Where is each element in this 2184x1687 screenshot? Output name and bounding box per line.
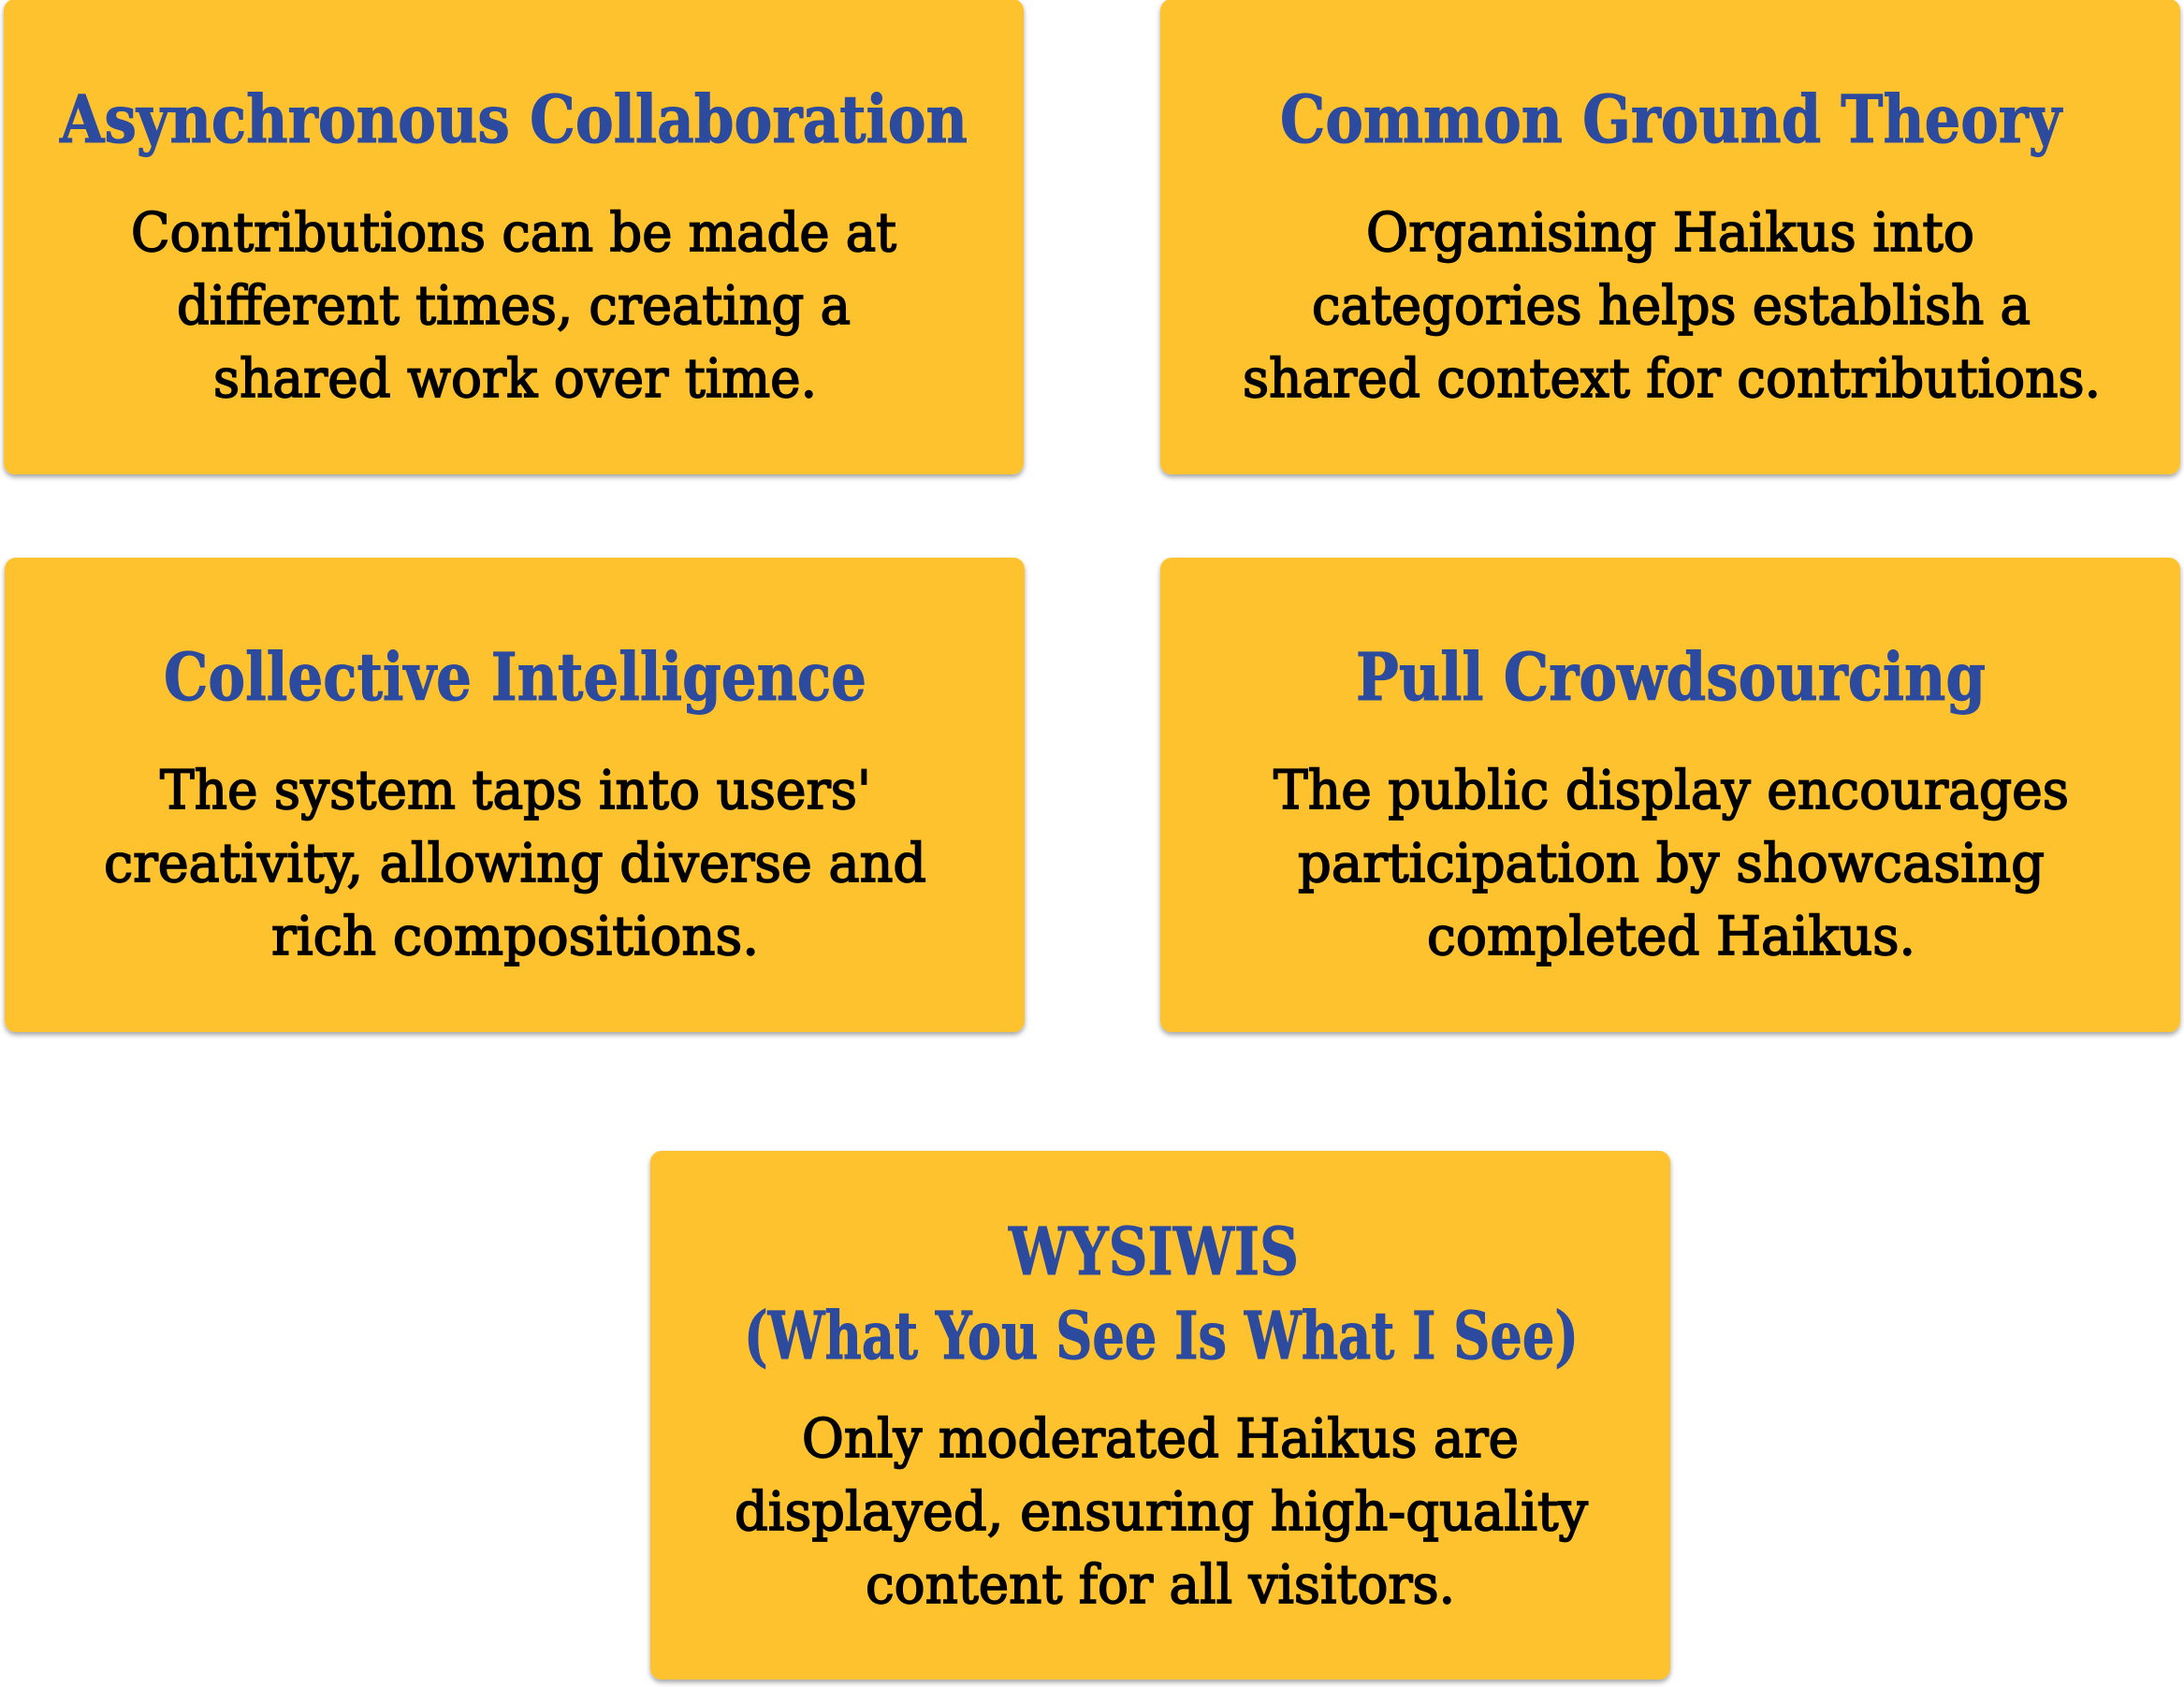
text block: Collective Intelligence description: creativity, allowing diverse and bbox=[104, 833, 926, 894]
text block: Pull Crowdsourcing description: completed Haikus. bbox=[1427, 906, 1915, 967]
heading: WYSIWIS (What You See Is What I See): (What You See Is What I See) bbox=[744, 1297, 1579, 1374]
panel: Pull Crowdsourcing bbox=[1160, 558, 2180, 1032]
text block: Collective Intelligence description: rich compositions. bbox=[271, 906, 759, 967]
panel: WYSIWIS bbox=[650, 1151, 1670, 1680]
text block: Pull Crowdsourcing description: participation by showcasing bbox=[1298, 833, 2045, 894]
text block: WYSIWIS description bbox=[735, 1408, 1589, 1616]
text block: Pull Crowdsourcing description: The public display encourages bbox=[1274, 760, 2069, 822]
heading: WYSIWIS (What You See Is What I See): WYSIWIS bbox=[1008, 1213, 1299, 1290]
text block: Collective Intelligence description: The system taps into users' bbox=[160, 760, 871, 822]
panel: Asynchronous Collaboration bbox=[4, 0, 1024, 474]
text block: Asynchronous Collaboration description bbox=[131, 202, 896, 410]
heading: Common Ground Theory: Common Ground Theory bbox=[1280, 80, 2063, 158]
text block: Collective Intelligence description bbox=[104, 760, 926, 967]
text block: WYSIWIS description: Only moderated Haikus are bbox=[802, 1408, 1519, 1470]
text block: Common Ground Theory description: shared context for contributions. bbox=[1243, 348, 2101, 410]
text block: WYSIWIS description: content for all visitors. bbox=[866, 1554, 1455, 1616]
panel: Collective Intelligence bbox=[5, 558, 1025, 1032]
text block: Asynchronous Collaboration description: different times, creating a bbox=[177, 275, 851, 337]
text block: Common Ground Theory description: Organising Haikus into bbox=[1366, 202, 1974, 264]
text block: Asynchronous Collaboration description: Contributions can be made at bbox=[131, 202, 896, 264]
text block: Common Ground Theory description bbox=[1243, 202, 2101, 410]
heading: Pull Crowdsourcing: Pull Crowdsourcing bbox=[1356, 638, 1986, 716]
heading: WYSIWIS (What You See Is What I See) bbox=[744, 1213, 1579, 1374]
heading: Collective Intelligence: Collective Intelligence bbox=[164, 638, 866, 716]
text block: WYSIWIS description: displayed, ensuring high-quality bbox=[735, 1481, 1589, 1543]
text block: Pull Crowdsourcing description bbox=[1274, 760, 2069, 967]
heading: Asynchronous Collaboration: Asynchronous Collaboration bbox=[59, 80, 968, 158]
text block: Asynchronous Collaboration description: shared work over time. bbox=[213, 348, 817, 410]
panel: Common Ground Theory bbox=[1160, 0, 2180, 474]
text block: Common Ground Theory description: categories helps establish a bbox=[1312, 275, 2031, 337]
